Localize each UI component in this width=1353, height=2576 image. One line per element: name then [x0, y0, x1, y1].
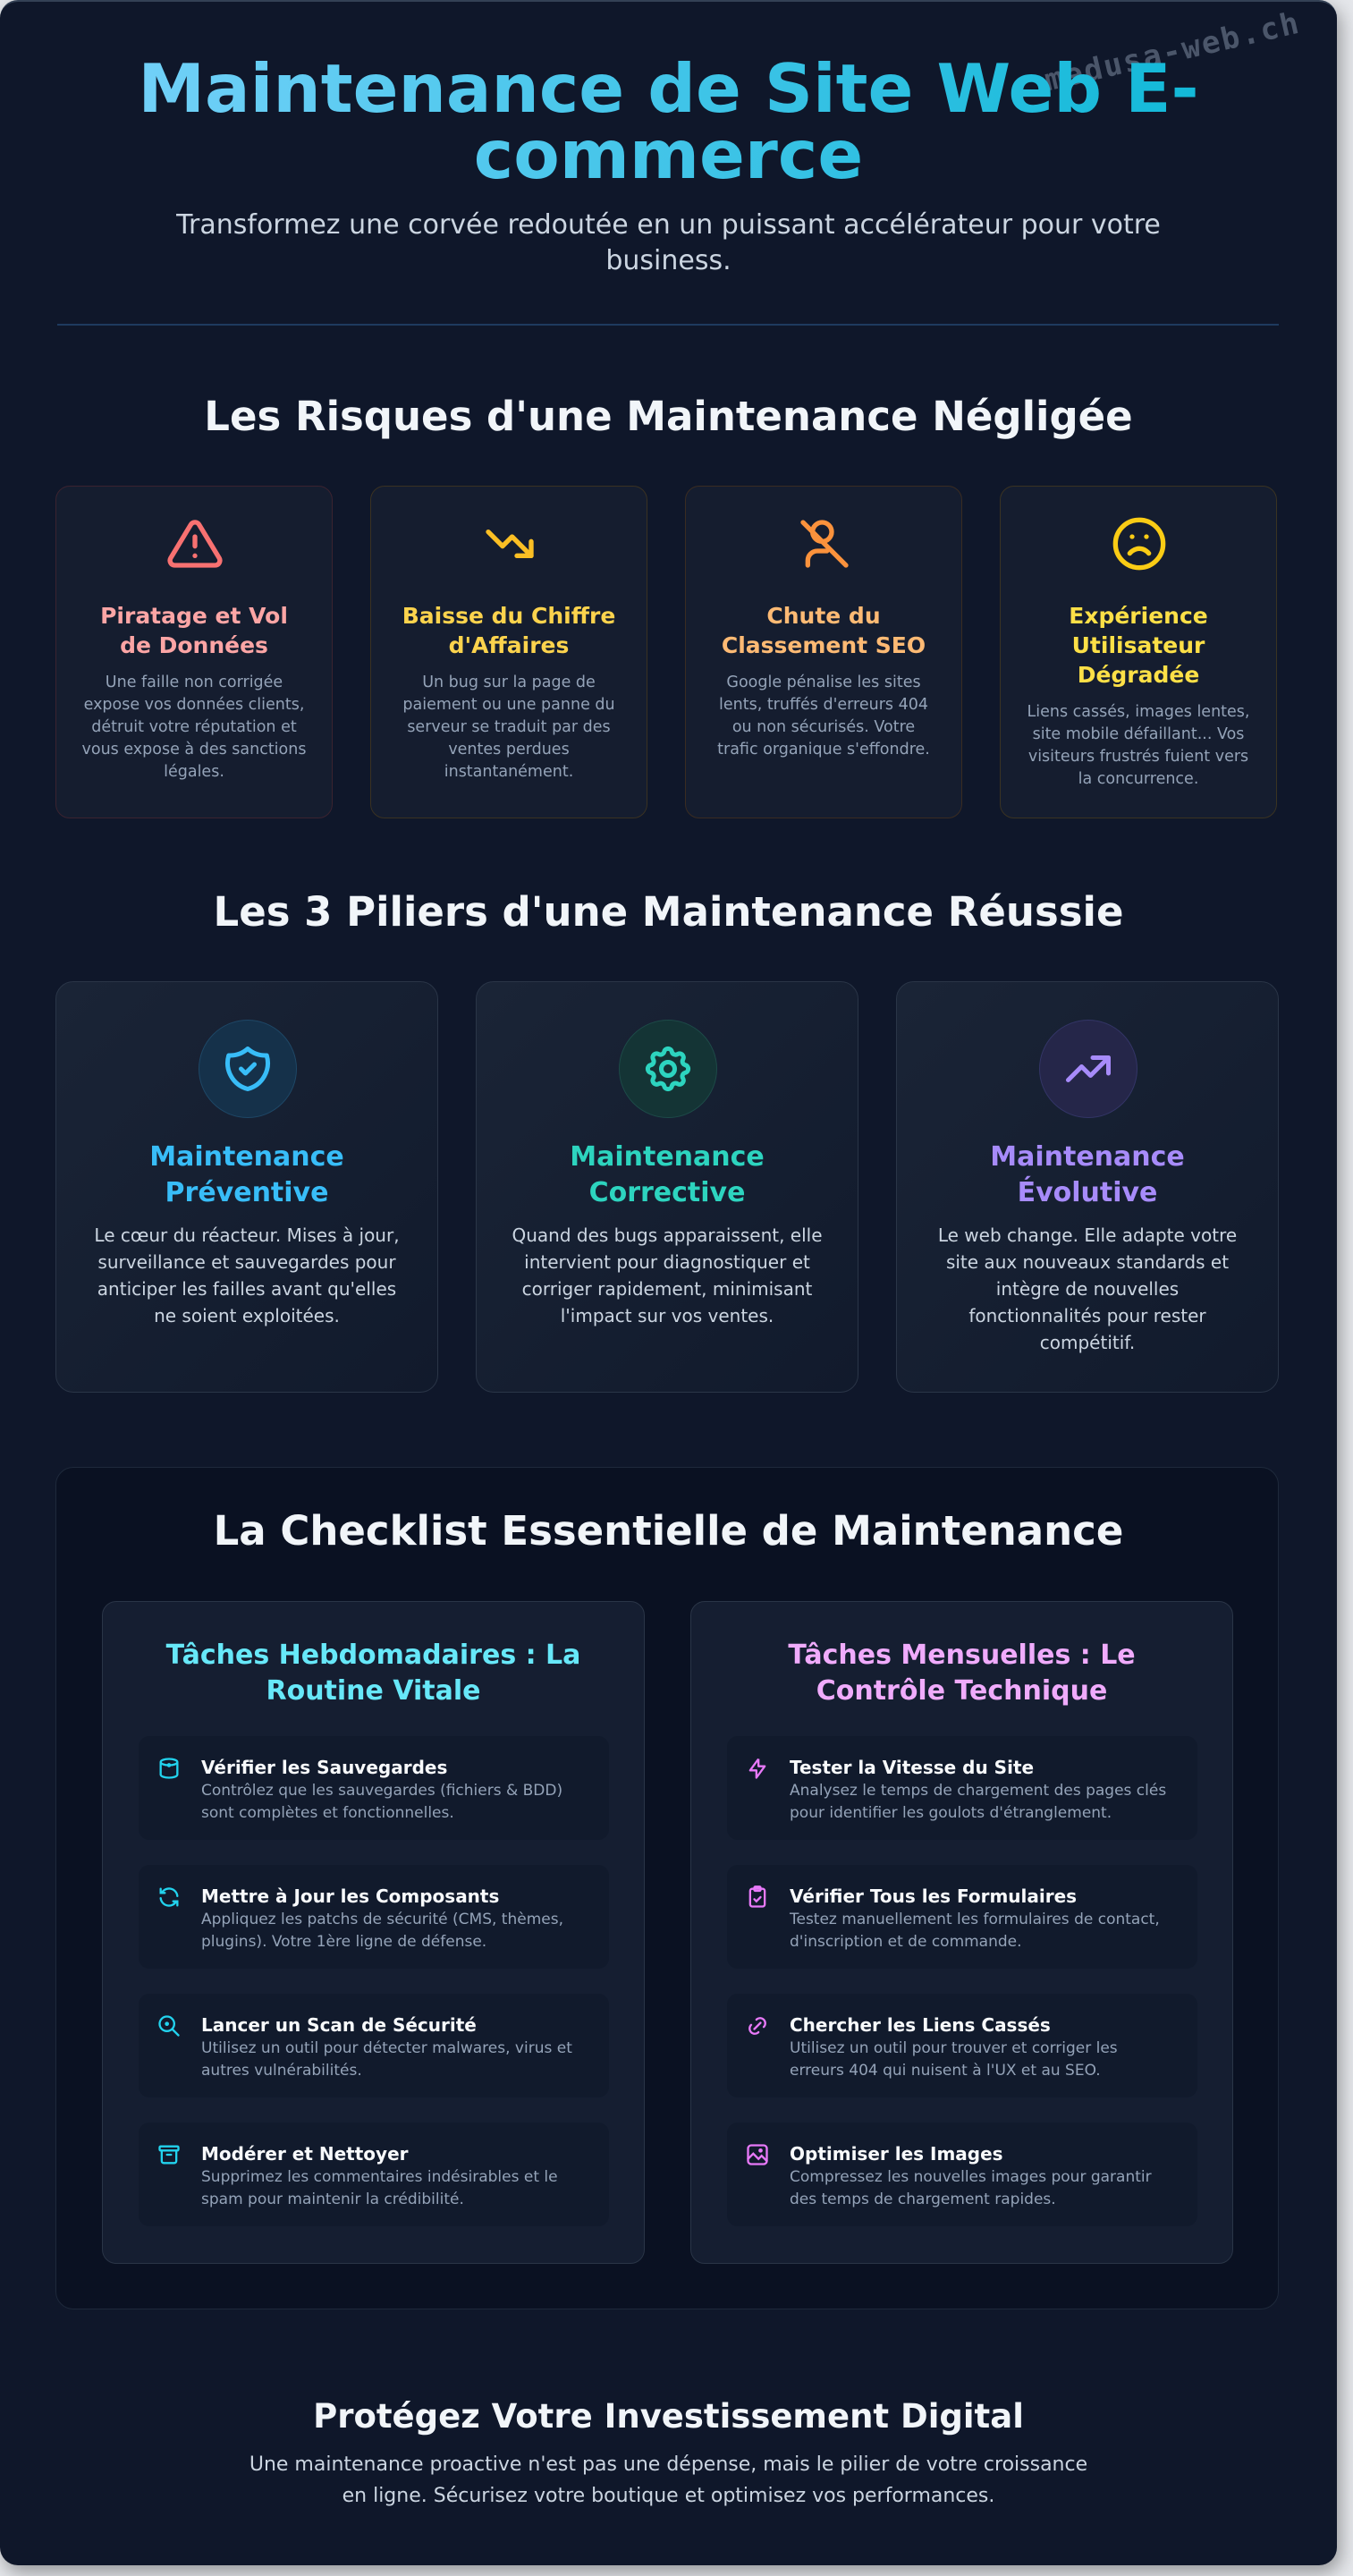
subtitle: Transformez une corvée redoutée en un puissant accélérateur pour votre business.	[176, 209, 1161, 276]
item: images: Optimiser les Images	[790, 2143, 1003, 2165]
title	[0, 55, 1337, 188]
risk card: piratage: expose vos données clients,	[84, 696, 304, 714]
pillar: corrective: Maintenance	[570, 1141, 765, 1173]
icon: gear	[619, 1020, 717, 1118]
item: formulaires	[727, 1865, 1197, 1969]
icon: trend down	[486, 530, 534, 558]
pillar: corrective: Corrective	[589, 1177, 745, 1208]
risk card: chiffre: Baisse du Chiffre	[402, 603, 615, 629]
risk card: seo: trafic organique s'effondre.	[717, 741, 930, 758]
item: sauvegardes: sont complètes et fonctionnelles.	[201, 1804, 454, 1822]
item: moderer: Modérer et Nettoyer	[201, 2143, 408, 2165]
risk card: ux: Utilisateur	[1072, 632, 1205, 658]
title: Maintenance de Site Web E-	[138, 49, 1199, 128]
pillar: preventive: Le cœur du réacteur. Mises à jour, surveillance et sauvegardes pour anticiper les failles avant qu'elles ne soient exploitées.	[94, 1224, 400, 1326]
subpanel: weekly: Routine Vitale	[266, 1675, 481, 1707]
risk card: chiffre: instantanément.	[444, 763, 573, 781]
pillar: preventive: Préventive	[165, 1177, 328, 1208]
risk card: piratage: légales.	[164, 763, 224, 781]
icon: sad face	[1112, 517, 1166, 571]
item: liens: erreurs 404 qui nuisent à l'UX et au SEO.	[790, 2062, 1101, 2080]
risk card: chiffre: d'Affaires	[449, 632, 569, 658]
pillar: evolutive: Évolutive	[1018, 1177, 1157, 1208]
footer text: en ligne. Sécurisez votre boutique et optimisez vos performances.	[342, 2485, 994, 2507]
item: formulaires: Vérifier Tous les Formulaires	[790, 1885, 1077, 1907]
item: vitesse: pour identifier les goulots d'étranglement.	[790, 1804, 1112, 1822]
panel: checklist	[55, 1467, 1279, 2309]
risk card: piratage: vous expose à des sanctions	[82, 741, 306, 758]
risk card: ux: Liens cassés, images lentes,	[1027, 703, 1249, 721]
risk card: chiffre: ventes perdues	[448, 741, 570, 758]
risk card: piratage: Une faille non corrigée	[106, 674, 283, 691]
risk card: seo: Chute du	[766, 603, 881, 629]
heading: risques: Les Risques d'une Maintenance Négligée	[204, 393, 1133, 440]
risk card: chiffre: serveur se traduit par des	[407, 718, 611, 736]
item: scan: Lancer un Scan de Sécurité	[201, 2014, 477, 2036]
risk card: ux: site mobile défaillant... Vos	[1033, 725, 1244, 743]
title: commerce	[474, 115, 863, 194]
item: formulaires: Testez manuellement les formulaires de contact,	[790, 1911, 1160, 1928]
risk card: chiffre: Un bug sur la page de	[422, 674, 596, 691]
risk card: ux: Dégradée	[1078, 662, 1199, 688]
subpanel: weekly	[102, 1601, 645, 2264]
item: composants: Appliquez les patchs de sécurité (CMS, thèmes,	[201, 1911, 563, 1928]
icon: trend up	[1039, 1020, 1137, 1118]
item: liens: Chercher les Liens Cassés	[790, 2014, 1051, 2036]
item: liens	[727, 1994, 1197, 2097]
item: formulaires: d'inscription et de commande.	[790, 1933, 1022, 1951]
item: images: des temps de chargement rapides.	[790, 2190, 1056, 2208]
risk card: piratage: Piratage et Vol	[100, 603, 288, 629]
item: scan: autres vulnérabilités.	[201, 2062, 362, 2080]
footer heading: Protégez Votre Investissement Digital	[313, 2397, 1024, 2436]
item: vitesse: Analysez le temps de chargement des pages clés	[790, 1782, 1166, 1800]
item: vitesse	[727, 1736, 1197, 1840]
subpanel: weekly: Tâches Hebdomadaires : La	[166, 1640, 580, 1671]
item: scan	[139, 1994, 609, 2097]
pillar: evolutive: Maintenance	[990, 1141, 1185, 1173]
risk card: chiffre: paiement ou une panne du	[402, 696, 615, 714]
heading: piliers: Les 3 Piliers d'une Maintenance Réussie	[214, 888, 1123, 936]
footer text	[249, 2453, 1087, 2507]
item: moderer: Supprimez les commentaires indésirables et le	[201, 2168, 558, 2186]
risk card: seo: lents, truffés d'erreurs 404	[719, 696, 928, 714]
footer text: Une maintenance proactive n'est pas une dépense, mais le pilier de votre croissance	[249, 2453, 1087, 2476]
icon: warning	[167, 520, 223, 568]
watermark: medusa-web.ch	[1041, 5, 1304, 98]
risk card: ux: visiteurs frustrés fuient vers	[1028, 748, 1248, 766]
item: scan: Utilisez un outil pour détecter malwares, virus et	[201, 2039, 572, 2057]
pillar: evolutive	[896, 981, 1279, 1393]
risk card: seo: ou non sécurisés. Votre	[732, 718, 915, 736]
item: vitesse: Tester la Vitesse du Site	[790, 1757, 1034, 1778]
item: sauvegardes	[139, 1736, 609, 1840]
item: composants: plugins). Votre 1ère ligne de défense.	[201, 1933, 486, 1951]
heading: checklist: La Checklist Essentielle de Maintenance	[214, 1507, 1123, 1555]
item: composants	[139, 1865, 609, 1969]
pillar: evolutive: Le web change. Elle adapte votre site aux nouveaux standards et intègre de nouvelles fonctionnalités pour rester compétitif.	[938, 1224, 1237, 1353]
icon: user off	[800, 520, 849, 568]
item: images: Compressez les nouvelles images pour garantir	[790, 2168, 1152, 2186]
risk card: piratage	[55, 486, 333, 818]
risk card: seo	[685, 486, 962, 818]
risk card: ux: la concurrence.	[1078, 770, 1198, 788]
icon: shield	[199, 1020, 297, 1118]
risk card: seo: Google pénalise les sites	[726, 674, 921, 691]
pillar: corrective	[476, 981, 858, 1393]
subpanel: monthly: Tâches Mensuelles : Le	[788, 1640, 1136, 1671]
risk card: seo: Classement SEO	[722, 632, 926, 658]
item: sauvegardes: Vérifier les Sauvegardes	[201, 1757, 447, 1778]
risk card: chiffre	[370, 486, 647, 818]
subpanel: monthly: Contrôle Technique	[816, 1675, 1107, 1707]
pillar: preventive	[55, 981, 438, 1393]
item: images	[727, 2123, 1197, 2226]
item: sauvegardes: Contrôlez que les sauvegardes (fichiers & BDD)	[201, 1782, 562, 1800]
risk card: piratage: détruit votre réputation et	[91, 718, 297, 736]
item: moderer: spam pour maintenir la crédibilité.	[201, 2190, 464, 2208]
item: liens: Utilisez un outil pour trouver et corriger les	[790, 2039, 1118, 2057]
item: composants: Mettre à Jour les Composants	[201, 1885, 499, 1907]
risk card: piratage: de Données	[120, 632, 268, 658]
subpanel: monthly	[690, 1601, 1233, 2264]
risk card: ux: Expérience	[1069, 603, 1208, 629]
pillar: corrective: Quand des bugs apparaissent, elle intervient pour diagnostiquer et corriger rapidement, minimisant l'impact sur vos ventes.	[512, 1224, 823, 1326]
pillar: preventive: Maintenance	[149, 1141, 344, 1173]
item: moderer	[139, 2123, 609, 2226]
risk card: ux	[1000, 486, 1277, 818]
